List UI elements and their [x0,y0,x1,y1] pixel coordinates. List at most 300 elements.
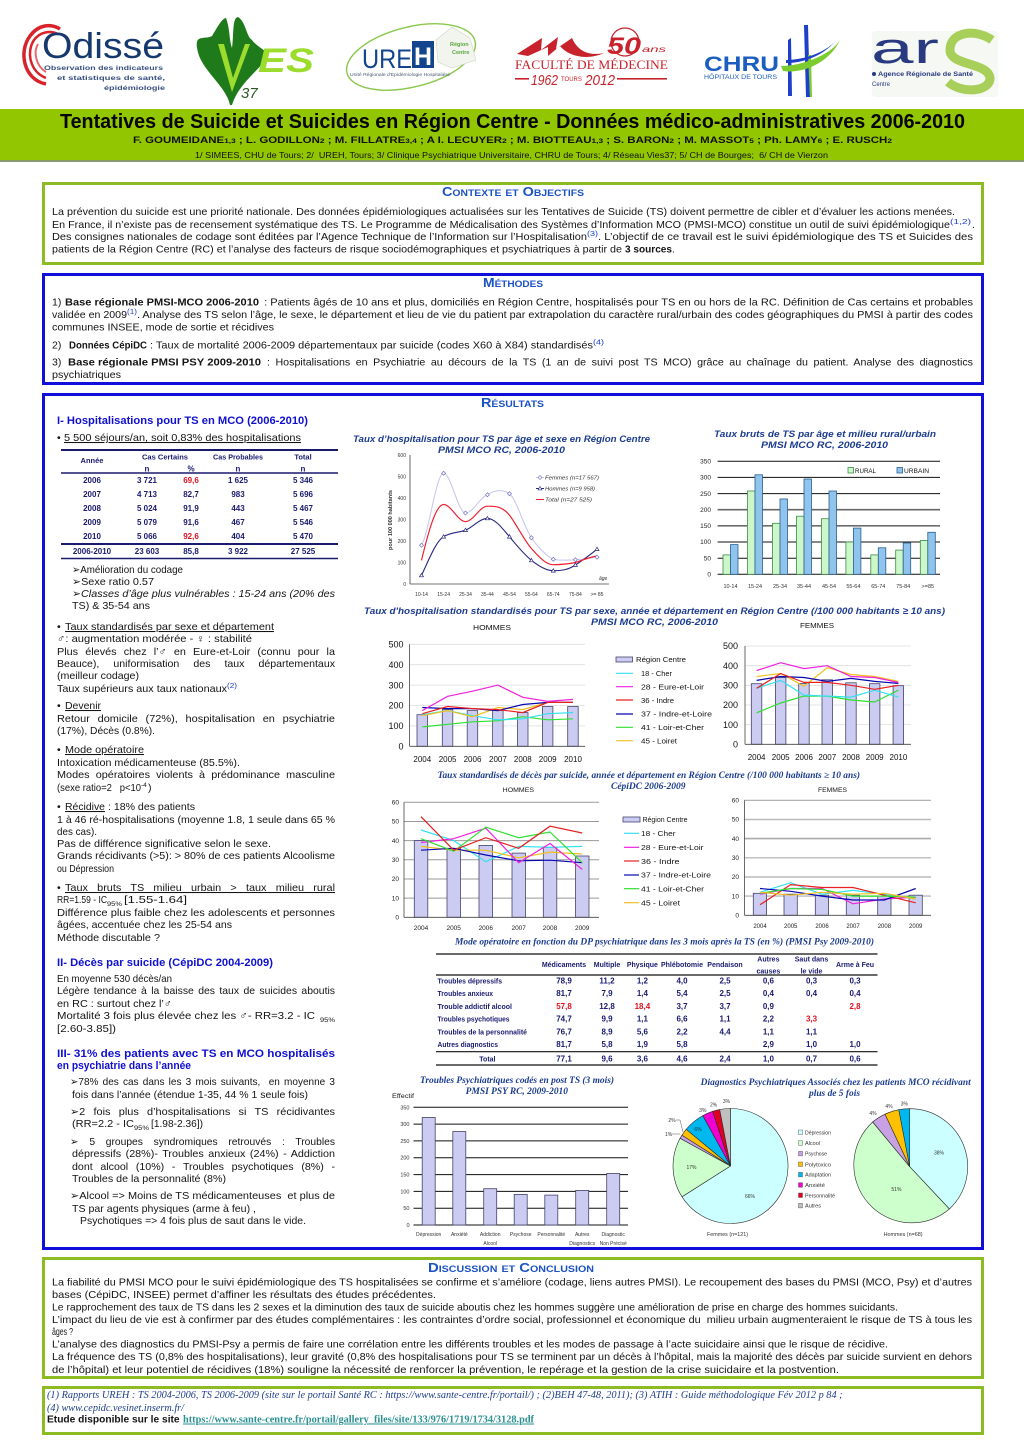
heading: Contexte et Objectifs [442,185,584,199]
legend: diagnostics: Autres [805,1204,822,1210]
text: devenir [57,700,335,737]
chart: taux bruts rural urbain: 75-84 [896,584,910,590]
table: séjours par année: Cas Certains [142,452,188,462]
table: séjours par année: Total [294,452,312,462]
logo: Faculté de Médecine: ans [642,45,666,54]
text: psychiatrie: dépressifs (28%)- Troubles anxieux (24%) - Addiction [72,1148,335,1160]
table: mode opératoire: 5,4 [676,989,688,998]
table: séjours par année: 5 024 [137,504,158,513]
table: mode opératoire: Troubles anxieux [438,991,493,998]
legend: décès: 41 - Loir-et-Cher [641,886,705,894]
table: mode opératoire: 4,4 [719,1028,731,1036]
logo: UREH: Région [450,42,469,48]
chart: hospitalisation hommes: 200 [388,701,404,711]
chart: hospitalisation femmes: 2005 [772,753,790,762]
pie chart: femmes: 17% [686,1165,697,1171]
chart: taux bruts rural urbain: 50 [704,555,711,562]
table: séjours par année: 27 525 [291,547,316,556]
chart: décès hommes: 0 [395,914,399,922]
chart: troubles psychiatriques: 50 [403,1206,410,1212]
text block: En France, il n’existe pas de recensement systématique des TS. Le Programme de Médicalisation des Systèmes d’Information MCO (PMSI-MCO) constitue un outil de suivi épidémiologique [52,219,950,231]
chart: décès femmes: 2007 [846,924,860,930]
table: mode opératoire: Médicaments [542,962,586,969]
table: mode opératoire: 4,6 [676,1054,688,1064]
pie chart: hommes: Hommes (n=68) [884,1232,923,1238]
table: séjours par année: 467 [231,518,245,527]
logo: Odissé: et statistiques de santé, [57,75,165,82]
logos row [24,12,998,105]
chart: hospitalisation femmes: 200 [723,700,738,710]
pie chart: femmes [665,1099,788,1238]
text block: . [972,219,975,231]
table: séjours par année: 443 [231,504,245,513]
chart: hospitalisation femmes: 2010 [890,753,908,762]
chart: troubles psychiatriques: PMSI PSY RC, 2009-2010 [466,1086,569,1096]
legend: diagnostics [798,1130,835,1210]
logo: Faculté de Médecine: 1962 [531,72,559,89]
panel: méthodes [44,274,982,384]
text: récidive: Pas de différence significative selon le sexe. [57,838,271,850]
table: séjours par année: 91,6 [183,518,199,527]
references text [47,1390,843,1414]
table: séjours par année: % [187,464,195,474]
chart: taux d'hospitalisation par âge et sexe [353,434,651,598]
chart: décès femmes: 30 [732,855,739,862]
table: séjours par année: 69,6 [183,476,199,485]
text: psychiatrie: [1.98-2.36]) [151,1118,203,1130]
table: mode opératoire: 5,8 [601,1040,613,1049]
logo: Faculté de Médecine: 50 [607,33,642,60]
chart: décès femmes: 50 [732,817,739,824]
chart: taux d'hospitalisation par âge et sexe: 25-34 [459,592,472,598]
logo: Odissé: épidémiologie [104,85,166,92]
chart: troubles psychiatriques: Diagnostic [602,1232,625,1238]
table: séjours par année: 404 [231,532,245,541]
title: Tentatives de Suicide et Suicides en Région Centre - Données médico-administratives 2006-2010 [60,111,965,133]
text: taux bruts urbain rural: âgées, accentuée chez les 25-54 ans [57,919,232,931]
logo: Faculté de Médecine [515,28,668,89]
chart: hospitalisation femmes: 100 [723,720,738,730]
chart: décès femmes [732,798,931,930]
text: taux bruts urbain rural: Méthode discutable ? [57,932,160,944]
chart: taux bruts rural urbain: 25-34 [773,584,787,590]
table: séjours par année: 5 470 [293,532,314,541]
table: séjours par année: n [145,464,150,474]
table: séjours par année: 2006-2010 [73,547,112,556]
text block: 3) [52,356,61,368]
chart: hospitalisation femmes: 2009 [866,753,884,762]
heading: Méthodes [483,276,543,290]
chart: hospitalisation femmes: 2006 [795,753,813,762]
chart: taux d'hospitalisation par âge et sexe: Taux d’hospitalisation pour TS par âge et sexe en Région Centre [353,434,651,445]
table: mode opératoire: 1,1 [719,1014,731,1024]
table: séjours par année: 2010 [83,532,101,541]
chart: taux d'hospitalisation par âge et sexe: 500 [398,474,406,480]
table: séjours par année: n [301,464,306,474]
chart: hospitalisation femmes: 0 [733,740,738,750]
text: devenir: Retour domicile (72%), hospitalisation en psychiatrie [57,713,335,725]
legend: hospitalisation [616,655,712,746]
chart: taux d'hospitalisation par âge et sexe: 45-54 [503,592,516,598]
text: psychiatrie: dont alcool (10%) - Troubles psychotiques (8%) - [72,1161,336,1173]
pie chart: femmes: 1% [665,1132,673,1138]
text: taux standardisés: ♂: augmentation modérée - ♀ : stabilité [57,633,252,645]
chart: hospitalisation femmes: 2008 [842,753,860,762]
table: mode opératoire: 0,7 [806,1054,818,1064]
text: psychiatrie: fois dans l’année (étendue 1-35, 44 % 1 seule fois) [72,1089,308,1101]
chart: décès femmes: 2004 [753,924,767,930]
table: mode opératoire: 77,1 [556,1054,572,1064]
chart heading: diagnostics associés: Diagnostics Psychiatriques Associés chez les patients MCO récidivant [700,1077,971,1087]
text: psychiatrie: ➢78% des cas dans les 3 mois suivants, en moyenne 3 [70,1076,335,1088]
legend: diagnostics: Adaptation [805,1173,831,1179]
chart: hospitalisation hommes: 2005 [439,755,457,764]
table: mode opératoire: le vide [801,968,822,976]
pie chart: hommes [854,1102,968,1238]
section III heading [57,1048,335,1072]
table: séjours par année: n [236,464,241,474]
text block: de l’hôpital) et leur potentiel de récidives (18%) souligne la nécessité de renforcer la prévention, le repérage et la gestion de la crise suicidaire et la postvention. [52,1364,839,1376]
chart: hospitalisation femmes: 500 [723,641,738,651]
logo: CHRU [704,25,840,97]
logo: Vies 37: 37 [241,85,258,102]
table: mode opératoire: 2,8 [849,1002,861,1011]
text: taux standardisés: (meilleur codage) [57,670,139,682]
table: mode opératoire: 9,6 [601,1054,613,1064]
chart: décès hommes: 20 [392,876,399,883]
table: mode opératoire: 2,9 [763,1040,775,1049]
text: récidive: 1 à 46 ré-hospitalisations (moyenne 1.8, 1 seule dans 65 % [57,814,335,826]
text: devenir: Devenir [65,700,101,712]
table: mode opératoire: 0,4 [849,989,861,998]
table: mode opératoire: 3,6 [637,1054,649,1064]
chart: hospitalisation hommes: 2007 [489,755,507,764]
logo: UREH: URE [362,44,412,74]
text: décès [57,973,335,1035]
text: taux standardisés: (2) [227,681,238,690]
table: mode opératoire: 2,2 [676,1028,688,1036]
text block: Le rapprochement des taux de TS dans les 2 sexes et la diminution des taux de suicide aboutis chez les hommes suggère une amélioration de prise en charge des hommes suicidants. [52,1302,898,1314]
table: mode opératoire: 12,8 [599,1002,615,1011]
chart: taux bruts rural urbain: 100 [700,539,711,546]
text: mode opératoire: • [57,744,61,756]
affiliations: 1/ SIMEES, CHU de Tours; 2/ UREH, Tours; 3/ Clinique Psychiatrique Universitaire, CHRU de Tours; 4/ Réseau Vies37; 5/ CH de Bourges; 6/ CH de Vierzon [195,151,828,160]
chart: hospitalisation hommes: 0 [398,742,404,752]
chart: taux bruts rural urbain: 55-64 [846,584,860,590]
logo: CHRU: CHRU [704,53,779,76]
pie chart: hommes: 38% [934,1151,945,1157]
text: taux bruts urbain rural: RR=1.59 - IC [57,894,107,906]
chart: taux bruts rural urbain: 35-44 [797,584,811,590]
table: mode opératoire: 2,2 [763,1014,775,1024]
pie chart: hommes: 3% [901,1102,909,1108]
logo: CHRU: HÔPITAUX DE TOURS [704,72,778,81]
legend: diagnostics: Alcool [805,1141,820,1147]
text: psychiatrie: ➢Alcool => Moins de TS médicamenteuses et plus de [70,1190,335,1202]
chart: hospitalisation hommes: 300 [388,680,404,690]
table: mode opératoire: 11,2 [599,976,615,986]
panel: références [44,1388,982,1434]
chart: troubles psychiatriques: Alcool [483,1241,497,1247]
chart: troubles psychiatriques: 200 [400,1156,410,1162]
table: mode opératoire: Pendaison [707,962,743,969]
text: mode opératoire: -4 [141,782,147,789]
chart: décès femmes: 20 [732,874,739,881]
text: taux standardisés: Taux standardisés par sexe et département [65,621,274,633]
table: séjours par année: 2009 [83,518,101,527]
pie chart: femmes: Femmes (n=121) [707,1232,748,1238]
text block: : Taux de mortalité 2006-2009 départementaux par suicide (codes X60 à X84) standardisés [150,340,593,352]
text: décès: en RC : surtout chez l’♂ [57,998,172,1010]
table: séjours par année: 82,7 [183,490,199,499]
chart: taux d'hospitalisation par âge et sexe: PMSI MCO RC, 2006-2010 [438,445,566,456]
text: mode opératoire: Intoxication médicamenteuse (85.5%). [57,757,240,769]
text: taux bruts urbain rural: • [57,882,61,894]
text: taux bruts urbain rural: 95% [107,901,122,908]
chart: troubles psychiatriques: Psychose [510,1232,532,1238]
pie chart: femmes: 2% [668,1118,676,1124]
text: taux standardisés: Plus élevés chez l’♂ en Eure-et-Loir (connu pour la [57,646,335,658]
logo: Vies 37 [197,17,314,105]
chart: troubles psychiatriques: Non Précisé [600,1241,627,1247]
pie chart: femmes: 66% [745,1194,756,1200]
legend: hospitalisation: 45 - Loiret [641,736,678,746]
chart: troubles psychiatriques: 250 [400,1139,410,1145]
legend: hospitalisation: 18 - Cher [641,669,672,678]
text: psychiatrie [70,1076,336,1227]
text: mode opératoire: Mode opératoire [65,744,144,756]
chart heading: taux standardisés: HOMMES [473,623,511,632]
chart: troubles psychiatriques: 0 [406,1223,410,1229]
table: mode opératoire: 1,0 [849,1040,861,1049]
chart: taux bruts rural urbain: 200 [700,507,711,514]
chart: taux d'hospitalisation par âge et sexe: 35-44 [481,592,494,598]
table: séjours par année: 3 721 [137,476,158,485]
chart: troubles psychiatriques: Personnalité [537,1232,565,1238]
text block: (1) [127,307,138,316]
chart: hospitalisation hommes [388,640,585,764]
legend: décès: 37 - Indre-et-Loire [641,872,711,880]
chart: taux bruts rural urbain: 300 [700,475,711,482]
chart: décès femmes: 2009 [909,924,923,930]
logo: ARS [871,24,998,97]
chart: décès hommes: 2004 [414,925,429,932]
pie chart: hommes: 4% [869,1111,877,1117]
chart: décès femmes: 2008 [878,924,892,930]
text block: (3) [587,229,599,238]
chart: taux bruts rural urbain: 15-24 [748,584,762,590]
chart: décès femmes: 2006 [815,924,829,930]
table: mode opératoire: 2,5 [719,976,731,986]
logo: Faculté de Médecine: 2012 [584,72,616,89]
chart: décès hommes: 40 [392,838,399,845]
chart: décès hommes: 60 [392,800,399,806]
text block [52,206,975,256]
panel: contexte et objectifs [44,184,982,264]
table: mode opératoire: Physique [627,962,658,969]
table: séjours par année: 5 696 [293,490,314,499]
legend: hospitalisation: Région Centre [636,655,686,664]
text block: La fréquence des TS (0,8% des hospitalisations), leur gravité (0,8% des hospitalisations pour TS se terminent par un décès à l’hôpital, mais la majorité des décès par suicide survient en dehors [52,1351,972,1363]
table: mode opératoire: 5,6 [637,1028,649,1036]
text: psychiatrie: 95% [134,1125,149,1132]
logo: Vies 37: ES [258,42,314,80]
chart: hospitalisation femmes: 2007 [818,753,837,762]
legend: décès: 36 - Indre [641,859,680,866]
pie chart: hommes: 51% [891,1187,902,1193]
study link [47,1414,535,1426]
chart: taux d'hospitalisation par âge et sexe: >= 85 [591,592,604,598]
text block: L’impact du lieu de vie est à confirmer par des études complémentaires : les contraintes d’ordre social, professionnel et économique du milieu urbain augmenteraient le risque de TS à tous les [52,1314,972,1326]
table: mode opératoire: 4,0 [676,976,688,986]
chart: taux d'hospitalisation par âge et sexe: 55-64 [525,592,538,598]
logo: UREH: H [414,43,432,71]
chart: décès hommes: 50 [392,819,399,826]
logo: Faculté de Médecine: FACULTÉ DE MÉDECINE [515,57,668,72]
logo: Odissé: Odissé [42,25,164,66]
text: récidive: Grands récidivants (>5): > 80% de ces patients Alcoolisme [57,850,335,862]
references text: (1) Rapports UREH : TS 2004-2006, TS 2006-2009 (site sur le portail Santé RC : https://www.sante-centre.fr/portail/) ; (2)BEH 47-48, 2011); (3) ATIH : Guide méthodologique Fév 2012 p 84 ; [47,1390,843,1401]
table: mode opératoire: Autres diagnostics [438,1042,498,1049]
chart: taux d'hospitalisation par âge et sexe: Hommes (n=9 958) [545,486,595,492]
text: mode opératoire [57,744,335,794]
logo: UREH: Centre [452,50,469,56]
text block: Des consignes nationales de codage sont éditées par l’Agence Technique de l’Information sur l’Hospitalisation [52,231,587,243]
text: taux standardisés: • [57,621,61,633]
text: psychiatrie: Troubles de la personnalité (8%) [72,1173,226,1185]
chart: décès hommes: 30 [392,857,399,864]
table: mode opératoire: 74,7 [556,1014,572,1024]
chart: hospitalisation femmes: 300 [723,680,738,690]
table: mode opératoire: Trouble addictif alcool [438,1004,512,1011]
text: codage: ➢Classes d’âge plus vulnérables : 15-24 ans (20% des [72,588,336,600]
text block [52,296,973,381]
text block: : Hospitalisations en Psychiatrie au décours de la TS (1 an de suivi post TS MCO) grâce au chaînage du patient. Analyse des diagnostics [267,356,973,368]
table: séjours par année: 91,9 [183,504,199,513]
text block: Base régionale PMSI-MCO 2006-2010 [65,296,259,308]
study link: Etude disponible sur le site [47,1414,180,1426]
chart: troubles psychiatriques: 150 [400,1173,410,1179]
chart: taux bruts rural urbain: 250 [700,491,711,498]
chart heading: décès [438,770,860,794]
table: séjours par année: 1 625 [228,476,249,485]
study link: https://www.sante-centre.fr/portail/gallery_files/site/133/976/1719/1734/3128.pdf [183,1414,535,1426]
authors: F. GOUMEIDANE 1,3 ; L. GODILLON 2 ; M. FILLATRE 3,4 ; A I. LECUYER 2 ; M. BIOTTEAU 1,3 ; S. BARON 2 ; M. MASSOT 5 ; Ph. LAMY 6 ; E. RUSCH 2 [133,135,892,145]
text: taux bruts urbain rural: Différence plus faible chez les adolescents et personnes [57,907,335,919]
text: taux bruts urbain rural: Taux bruts TS milieu urbain > taux milieu rural [65,882,335,894]
table: mode opératoire: Arme à Feu [836,962,874,969]
table: séjours par année: 983 [231,490,245,499]
chart: taux d'hospitalisation par âge et sexe: pour 100 000 habitants [388,490,394,550]
text block: (1,2) [950,217,972,226]
text: récidive: ou Dépression [57,863,114,875]
legend: hospitalisation: 37 - Indre-et-Loire [641,710,712,718]
table: mode opératoire: Autres [757,956,780,964]
key figure: • [57,432,61,444]
chart: hospitalisation hommes: 2004 [413,755,432,764]
chart: taux d'hospitalisation par âge et sexe: 100 [398,560,406,566]
text: décès: [2.60-3.85]) [57,1023,116,1035]
table: mode opératoire: 1,9 [637,1040,649,1049]
chart: taux bruts rural urbain: RURAL [855,469,877,475]
text: mode opératoire: (sexe ratio=2 p<10 [57,782,141,794]
chart: décès femmes: 0 [735,912,739,920]
table: séjours par année: 5 546 [293,518,314,527]
chart: décès hommes [392,800,599,932]
table: séjours par année: 5 467 [293,504,314,513]
table: mode opératoire: Multiple [594,962,620,969]
table: séjours par année: 92,6 [183,532,199,541]
text block: . L’objectif de ce travail est le suivi épidémiologique des TS et Suicides des [598,231,973,243]
chart: taux bruts rural urbain: 10-14 [723,584,738,590]
legend: décès [623,817,711,908]
table: mode opératoire: 0,3 [806,976,818,986]
table: séjours par année: 5 346 [293,476,314,485]
legend: diagnostics: Personnalité [805,1193,835,1199]
heading: Résultats [481,396,544,410]
chart: hospitalisation hommes: 2009 [539,755,557,764]
section I heading: I- Hospitalisations pour TS en MCO (2006-2010) [57,415,308,427]
text block: La prévention du suicide est une priorité nationale. Des données épidémiologiques actualisées sur les Tentatives de Suicide (TS) doivent permettre de cibler et d’évaluer les actions menées. [52,206,955,218]
chart: décès femmes: 40 [732,836,739,843]
text: taux standardisés: Taux supérieurs aux taux nationaux [57,683,228,695]
chart: taux bruts rural urbain: 65-74 [871,584,885,590]
legend: décès: 28 - Eure-et-Loir [641,845,704,852]
chart: décès femmes: 10 [732,893,739,900]
text: récidive: • [57,801,61,813]
table: séjours par année: Année [81,456,103,465]
table: mode opératoire: 1,1 [637,1014,649,1024]
table: séjours par année: 2008 [83,504,101,513]
text block [52,1276,972,1376]
chart: troubles psychiatriques: 100 [400,1189,410,1195]
table: mode opératoire: 5,8 [676,1040,688,1049]
table: mode opératoire: 0,4 [806,989,818,998]
table: mode opératoire: 1,4 [637,989,649,998]
header band [0,109,1024,162]
panel: discussion et conclusion [44,1258,982,1378]
chart: taux bruts rural urbain: >=85 [922,584,934,590]
table: mode opératoire: 76,7 [556,1028,572,1036]
text: psychiatrie: TS par agents physiques (arme à feu) , [72,1203,256,1215]
text: mode opératoire: Modes opératoires violents à prédominance masculine [57,769,335,781]
table: mode opératoire: 9,9 [601,1014,613,1024]
table: mode opératoire: 78,9 [556,976,572,986]
logo: Odissé: Observation des indicateurs [44,65,164,72]
table: séjours par année: 23 603 [135,547,160,556]
logo: ARS: ar [871,24,939,73]
logo: Faculté de Médecine: TOURS [561,77,582,83]
heading: Discussion et Conclusion [428,1261,594,1275]
text block: La fiabilité du PMSI MCO pour le suivi épidémiologique des TS hospitalisées se confirme et s’améliore (codage, liens autres PMSI). Le recoupement des bases du PMSI (MCO, Psy) et d’autres [52,1276,972,1288]
chart: taux bruts rural urbain: 0 [707,572,711,578]
text: psychiatrie: (RR=2.2 - IC [72,1118,134,1130]
text: récidive [57,801,335,875]
chart: troubles psychiatriques [392,1075,628,1247]
text: psychiatrie: ➢2 fois plus d’hospitalisations si TS récidivantes [70,1106,335,1118]
text: devenir: • [57,700,61,712]
table: mode opératoire: 0,6 [763,976,775,986]
chart: troubles psychiatriques: Troubles Psychiatriques codés en post TS (3 mois) [420,1075,614,1085]
section III heading: III- 31% des patients avec TS en MCO hospitalisés [57,1048,335,1060]
chart heading: taux standardisés [364,606,945,632]
text: décès: Mortalité 3 fois plus élevée chez les ♂- RR=3.2 - IC [57,1010,315,1022]
chart heading: décès: HOMMES [503,787,535,794]
chart: taux d'hospitalisation par âge et sexe: 400 [398,496,406,502]
section III heading: en psychiatrie dans l’année [57,1060,191,1072]
legend: diagnostics: Anxiété [805,1183,825,1189]
legend: hospitalisation: 41 - Loir-et-Cher [641,723,705,732]
